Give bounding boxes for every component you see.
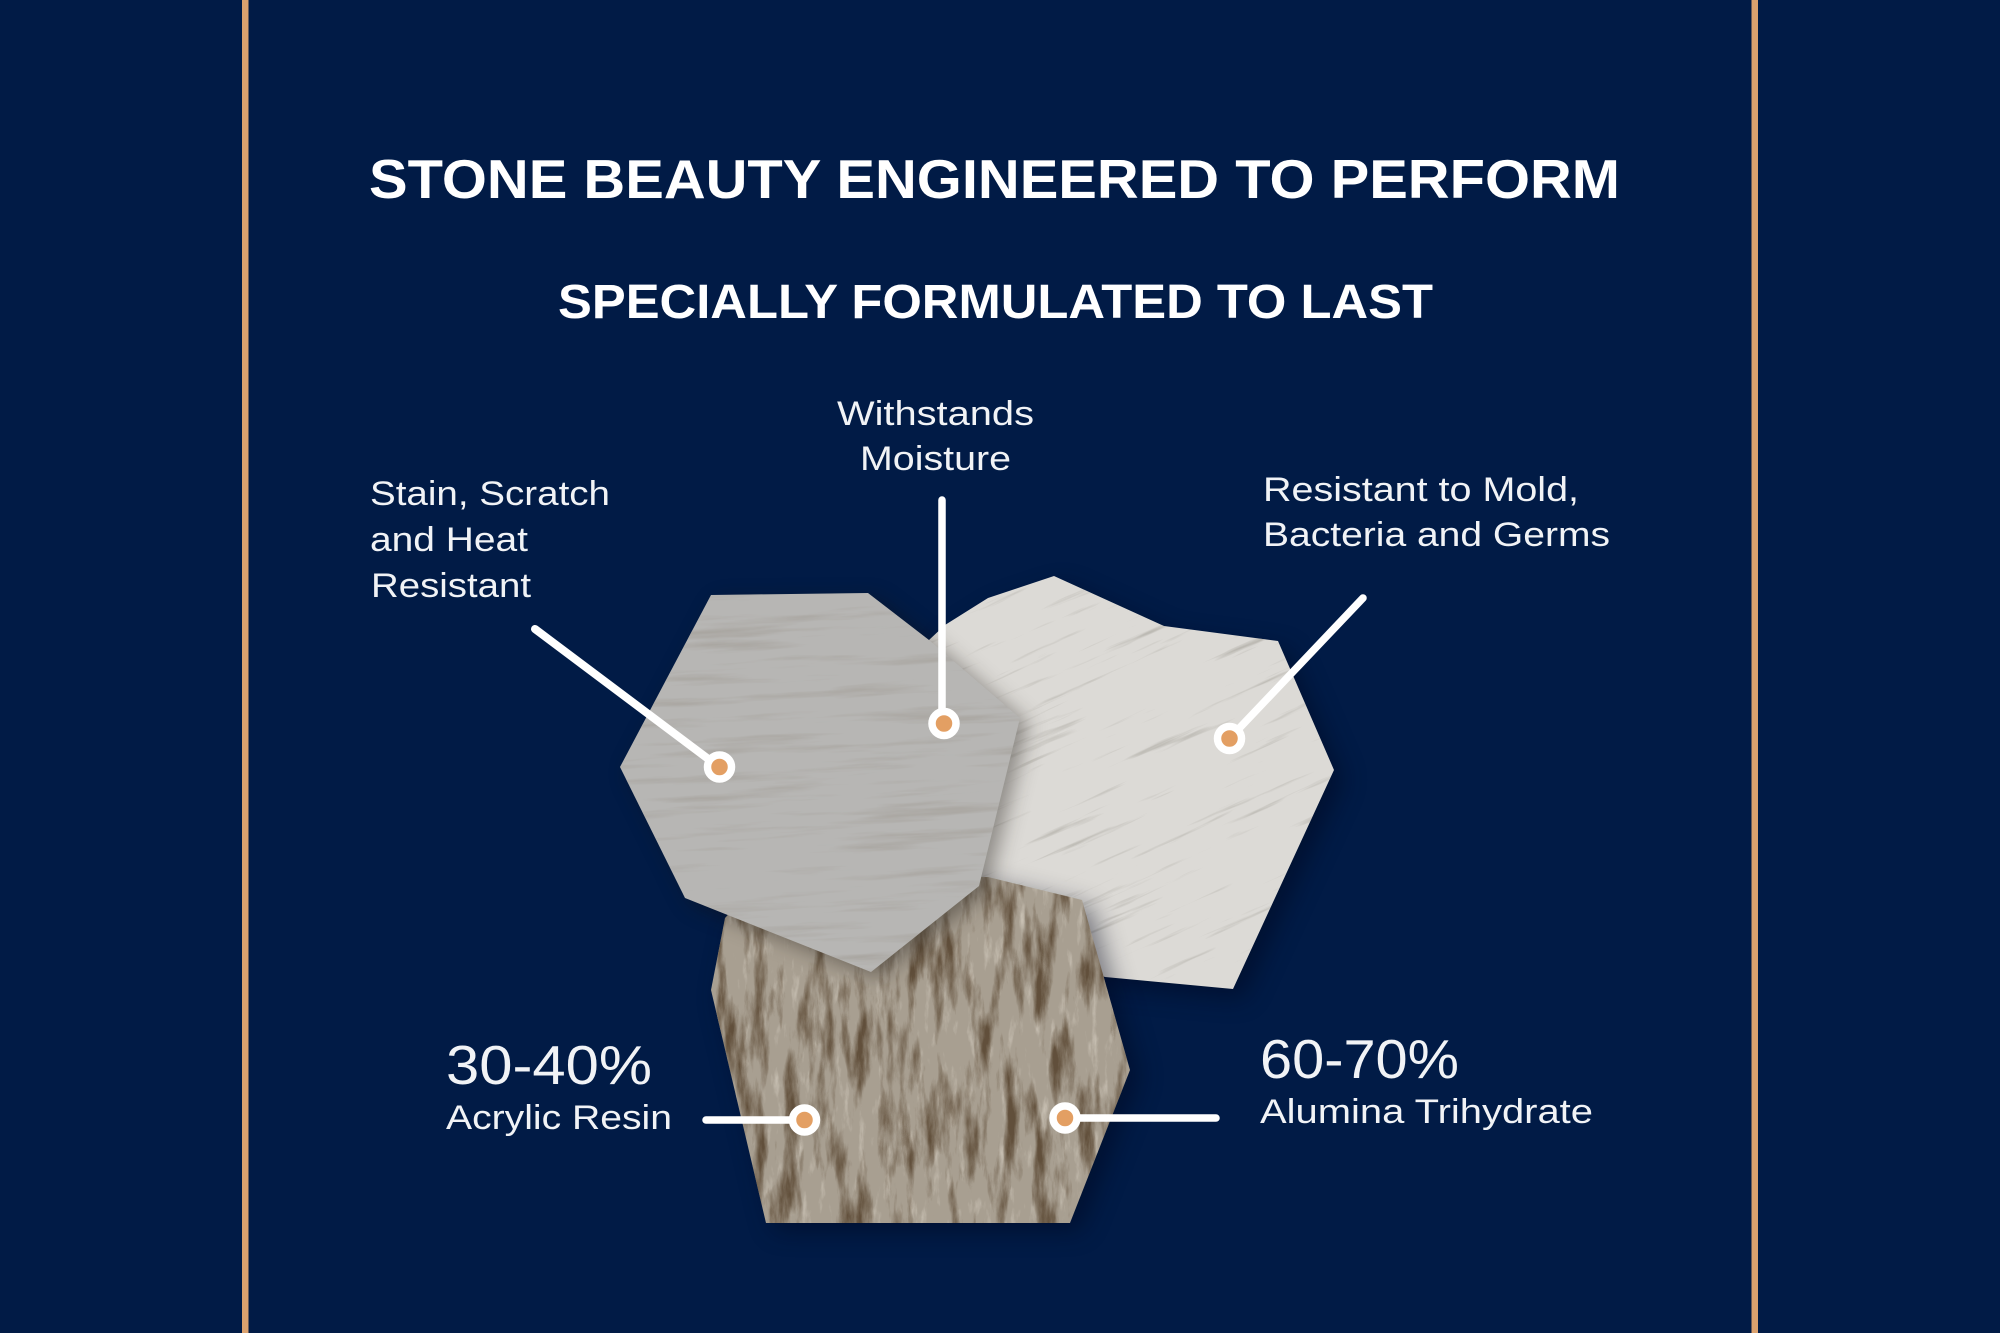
label: Alumina Trihydrate [1260,1093,1593,1131]
label: Acrylic Resin [446,1099,672,1137]
stone: brown quartzite [711,870,1140,1234]
subtitle: SPECIALLY FORMULATED TO LAST [558,276,1433,329]
label: Bacteria and Germs [1263,516,1610,554]
label [1263,471,1610,554]
leader line and marker [1218,598,1363,750]
leader line and marker [932,500,956,736]
callout: resistant to mold, bacteria and germs [1218,471,1610,750]
label [837,395,1034,478]
label: Stain, Scratch [370,475,610,513]
callout: 60-70% alumina trihydrate [1053,1028,1593,1131]
stone: white marble [929,576,1344,1000]
callout: stain, scratch and heat resistant [370,475,732,779]
right accent rule [1752,0,1758,1333]
leader line and marker [706,1108,816,1132]
label: Moisture [860,440,1011,478]
callout: withstands moisture [837,395,1034,736]
callout: 30-40% acrylic resin [446,1034,816,1137]
stone: grey marble [620,593,1038,986]
label: and Heat [370,521,529,559]
label: Withstands [837,395,1034,433]
label [370,475,610,605]
panel: stone samples [535,576,1344,1234]
label: Resistant to Mold, [1263,471,1579,509]
leader line and marker [535,629,732,779]
label: Resistant [371,567,532,605]
left accent rule [242,0,248,1333]
leader line and marker [1053,1106,1216,1130]
stat: 30-40% [446,1034,652,1096]
title: STONE BEAUTY ENGINEERED TO PERFORM [369,148,1620,210]
stat: 60-70% [1260,1028,1459,1090]
